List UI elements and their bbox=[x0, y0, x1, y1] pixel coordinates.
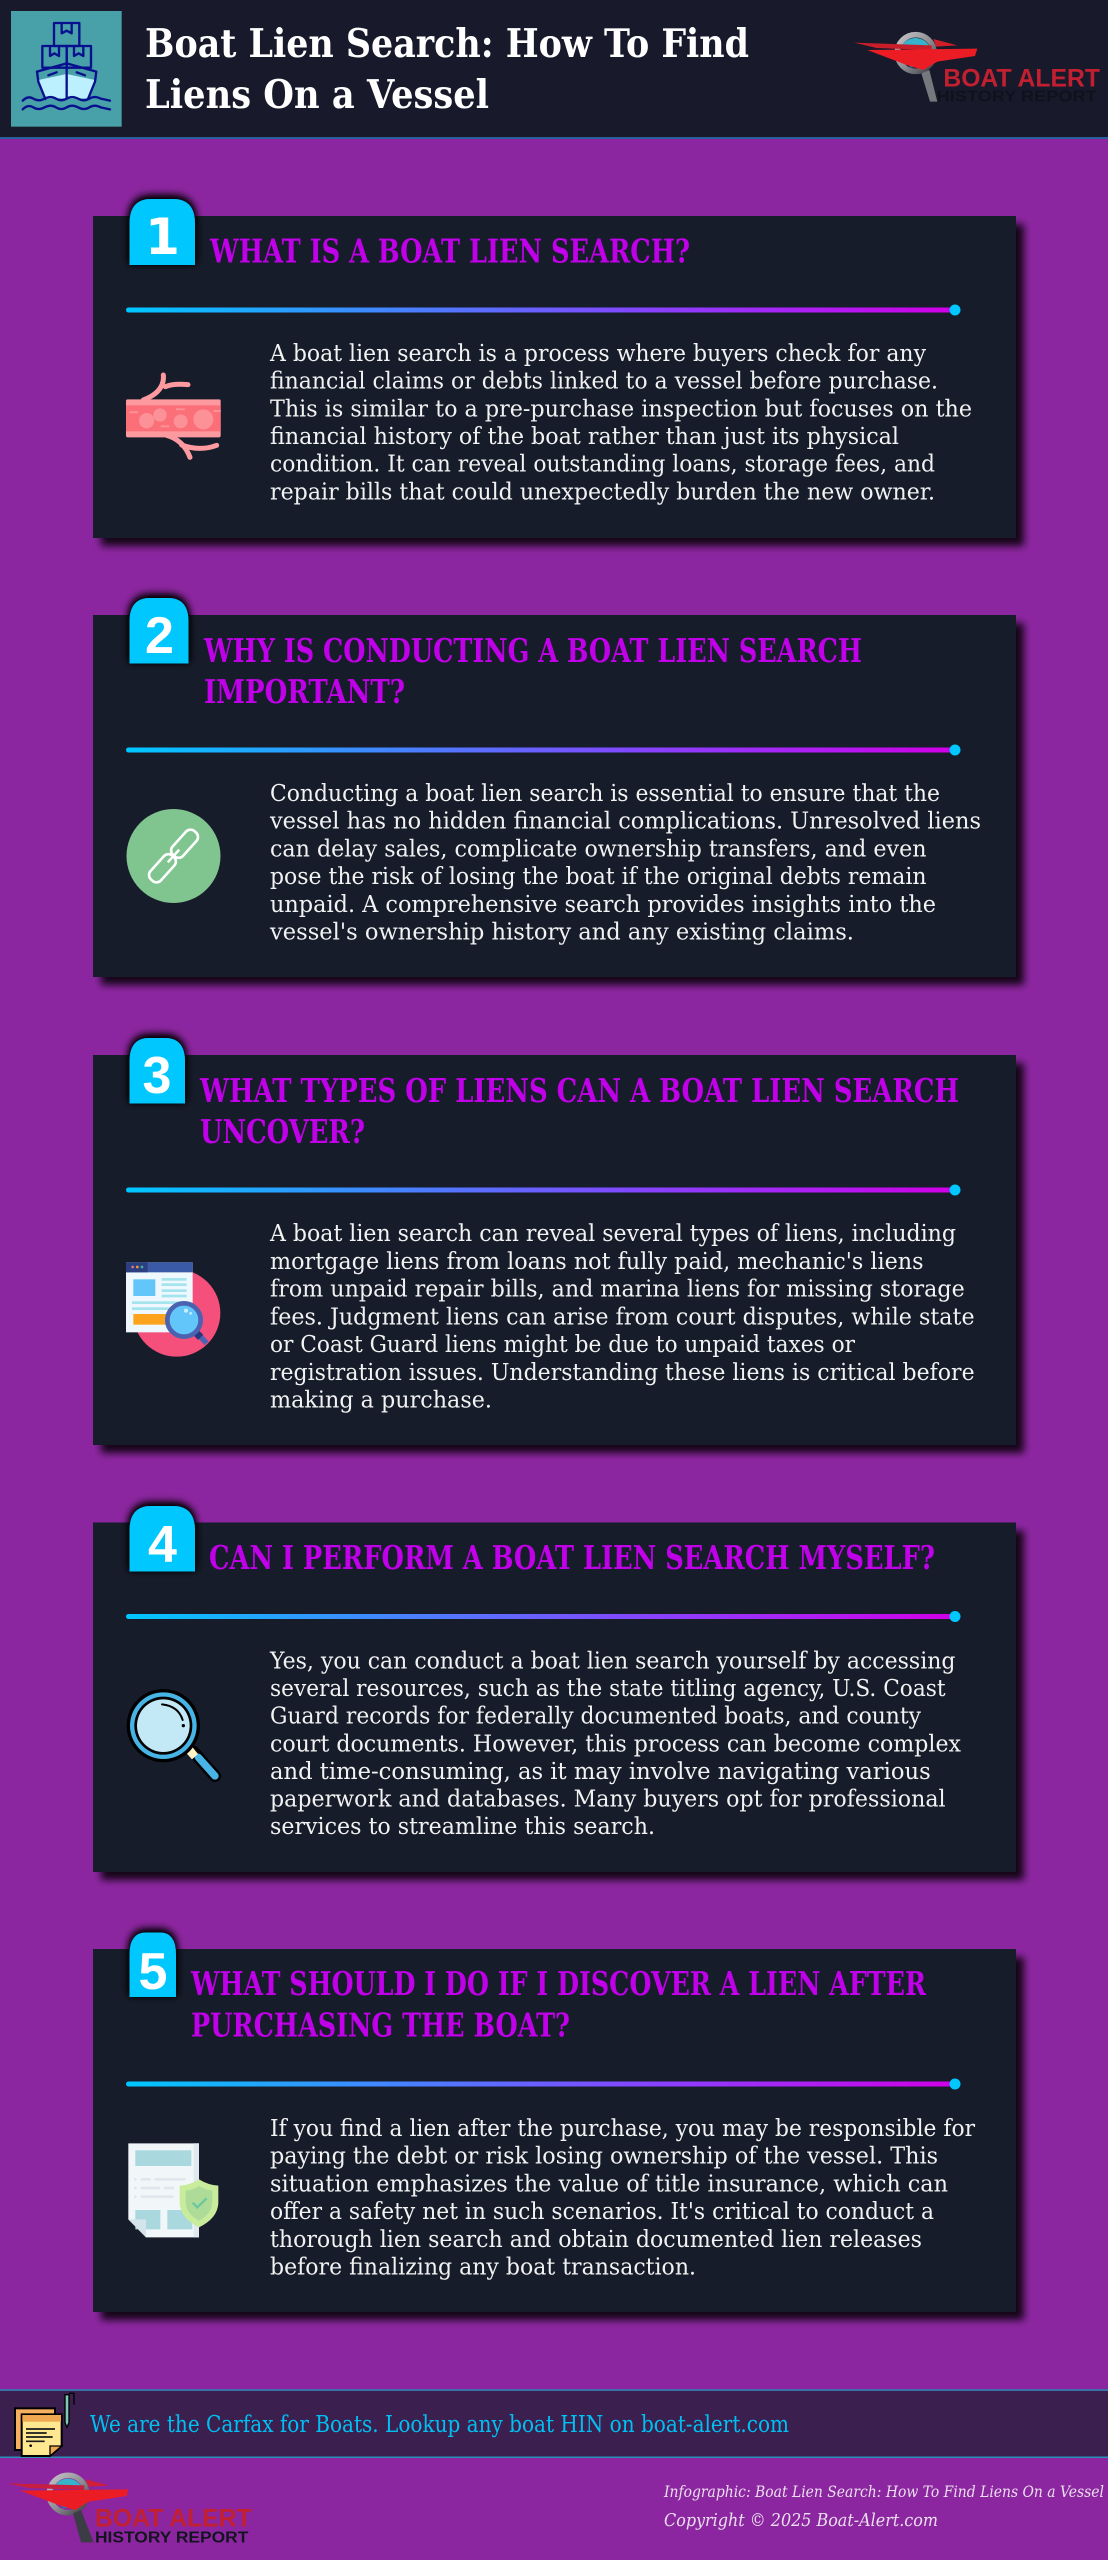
panel 1: what is a boat lien search bbox=[93, 199, 1016, 538]
divider bbox=[126, 744, 960, 756]
call-to-action bar bbox=[0, 2389, 1108, 2458]
number badge 5: 5 bbox=[139, 1943, 167, 2001]
logo: Boat Alert footer bbox=[7, 2475, 252, 2546]
body text: This is similar to a pre-purchase inspection but focuses on the bbox=[270, 394, 972, 422]
body text: condition. It can reveal outstanding loans, storage fees, and bbox=[270, 450, 935, 478]
icon: web page with magnifier bbox=[126, 1262, 220, 1357]
icon: magnifying glass bbox=[127, 1689, 215, 1776]
body text: unpaid. A comprehensive search provides insights into the bbox=[270, 890, 936, 918]
footer credit text: Copyright © 2025 Boat-Alert.com bbox=[664, 2510, 938, 2531]
body text: several resources, such as the state titling agency, U.S. Coast bbox=[270, 1674, 946, 1702]
heading: WHAT IS A BOAT LIEN SEARCH? bbox=[209, 232, 690, 270]
body text: paperwork and databases. Many buyers opt for professional bbox=[270, 1785, 946, 1813]
number badge 3: 3 bbox=[143, 1047, 171, 1105]
card background bbox=[93, 216, 1016, 538]
body text: paying the debt or risk losing ownership of the vessel. This bbox=[270, 2142, 938, 2170]
body text: Guard records for federally documented boats, and county bbox=[270, 1702, 922, 1730]
header band bbox=[0, 0, 1108, 139]
call-to-action text: We are the Carfax for Boats. Lookup any boat HIN on boat-alert.com bbox=[90, 2412, 789, 2438]
body text: A boat lien search can reveal several types of liens, including bbox=[269, 1219, 956, 1247]
title: Liens On a Vessel bbox=[145, 72, 489, 118]
body text: registration issues. Understanding these liens is critical before bbox=[270, 1358, 975, 1386]
body text bbox=[269, 1646, 961, 1840]
number badge 1 bbox=[130, 199, 195, 266]
footer credit text bbox=[663, 2483, 1104, 2531]
number badge 1: 1 bbox=[145, 208, 180, 266]
body text: services to streamline this search. bbox=[270, 1812, 655, 1840]
body text: can delay sales, complicate ownership transfers, and even bbox=[270, 834, 926, 862]
divider bbox=[126, 1611, 960, 1622]
logo: Boat Alert footer: HISTORY REPORT bbox=[95, 2529, 249, 2546]
title bbox=[145, 21, 749, 118]
body text: Yes, you can conduct a boat lien search yourself by accessing bbox=[269, 1646, 956, 1674]
card background bbox=[93, 615, 1016, 977]
heading: WHY IS CONDUCTING A BOAT LIEN SEARCH bbox=[203, 631, 862, 670]
divider bbox=[126, 304, 960, 316]
body text: financial history of the boat rather than just its physical bbox=[270, 422, 899, 450]
divider bbox=[126, 2078, 960, 2090]
card background bbox=[93, 1949, 1016, 2312]
body text: A boat lien search is a process where buyers check for any bbox=[269, 339, 927, 367]
card background bbox=[93, 1522, 1016, 1872]
body text: court documents. However, this process can become complex bbox=[270, 1729, 961, 1757]
body text: situation emphasizes the value of title insurance, which can bbox=[270, 2169, 948, 2197]
icon: chain link bbox=[126, 809, 220, 903]
body text: offer a safety net in such scenarios. It's critical to conduct a bbox=[270, 2197, 934, 2225]
divider bbox=[126, 1184, 960, 1196]
title: Boat Lien Search: How To Find bbox=[145, 21, 749, 67]
panel 4: do it yourself bbox=[93, 1506, 1016, 1872]
icon: notes and pen bbox=[15, 2393, 74, 2456]
body text: If you find a lien after the purchase, you may be responsible for bbox=[270, 2114, 976, 2142]
logo: Boat Alert header: HISTORY REPORT bbox=[937, 89, 1097, 106]
panel 3: types of liens bbox=[93, 1038, 1016, 1445]
body text: vessel's ownership history and any existing claims. bbox=[269, 918, 854, 946]
logo: Boat Alert footer: BOAT ALERT bbox=[95, 2505, 252, 2533]
panel 5: lien found after purchase bbox=[93, 1932, 1016, 2312]
body text: Conducting a boat lien search is essential to ensure that the bbox=[270, 779, 940, 807]
body text: financial claims or debts linked to a vessel before purchase. bbox=[270, 367, 938, 395]
number badge 5 bbox=[130, 1932, 176, 2001]
card background bbox=[93, 1055, 1016, 1445]
number badge 4: 4 bbox=[148, 1516, 177, 1574]
body text bbox=[270, 2114, 976, 2280]
icon: insured document with shield bbox=[128, 2143, 218, 2237]
heading bbox=[199, 1071, 959, 1151]
number badge 2: 2 bbox=[145, 607, 174, 665]
heading: UNCOVER? bbox=[200, 1112, 365, 1151]
number badge 4 bbox=[130, 1506, 195, 1574]
logo: Boat Alert header: BOAT ALERT bbox=[943, 65, 1100, 93]
body text: and time-consuming, as it may involve navigating various bbox=[270, 1757, 931, 1785]
number badge 3 bbox=[130, 1038, 185, 1105]
body text bbox=[269, 779, 981, 946]
logo: Boat Alert header bbox=[854, 35, 1100, 106]
body text: repair bills that could unexpectedly burden the new owner. bbox=[270, 477, 935, 505]
body text: from unpaid repair bills, and marina liens for missing storage bbox=[270, 1274, 965, 1302]
heading bbox=[203, 631, 862, 711]
body text: fees. Judgment liens can arise from court disputes, while state bbox=[270, 1302, 975, 1330]
body text bbox=[269, 339, 972, 505]
number badge 2 bbox=[130, 598, 188, 665]
heading: PURCHASING THE BOAT? bbox=[191, 2006, 570, 2045]
heading: WHAT SHOULD I DO IF I DISCOVER A LIEN AFTER bbox=[190, 1964, 927, 2003]
icon: cargo ship bbox=[11, 11, 122, 127]
icon: blood vessel bbox=[126, 375, 221, 457]
heading: CAN I PERFORM A BOAT LIEN SEARCH MYSELF? bbox=[209, 1538, 935, 1577]
body text: vessel has no hidden financial complications. Unresolved liens bbox=[269, 807, 981, 835]
body text: pose the risk of losing the boat if the original debts remain bbox=[270, 862, 926, 890]
body text bbox=[269, 1219, 975, 1414]
body text: making a purchase. bbox=[270, 1386, 492, 1414]
panel 2: why important bbox=[93, 598, 1016, 977]
body text: mortgage liens from loans not fully paid, mechanic's liens bbox=[270, 1247, 924, 1275]
body text: before finalizing any boat transaction. bbox=[270, 2252, 696, 2280]
body text: thorough lien search and obtain documented lien releases bbox=[270, 2225, 922, 2253]
heading: IMPORTANT? bbox=[204, 672, 405, 711]
heading bbox=[190, 1964, 927, 2045]
body text: or Coast Guard liens might be due to unpaid taxes or bbox=[270, 1330, 856, 1358]
